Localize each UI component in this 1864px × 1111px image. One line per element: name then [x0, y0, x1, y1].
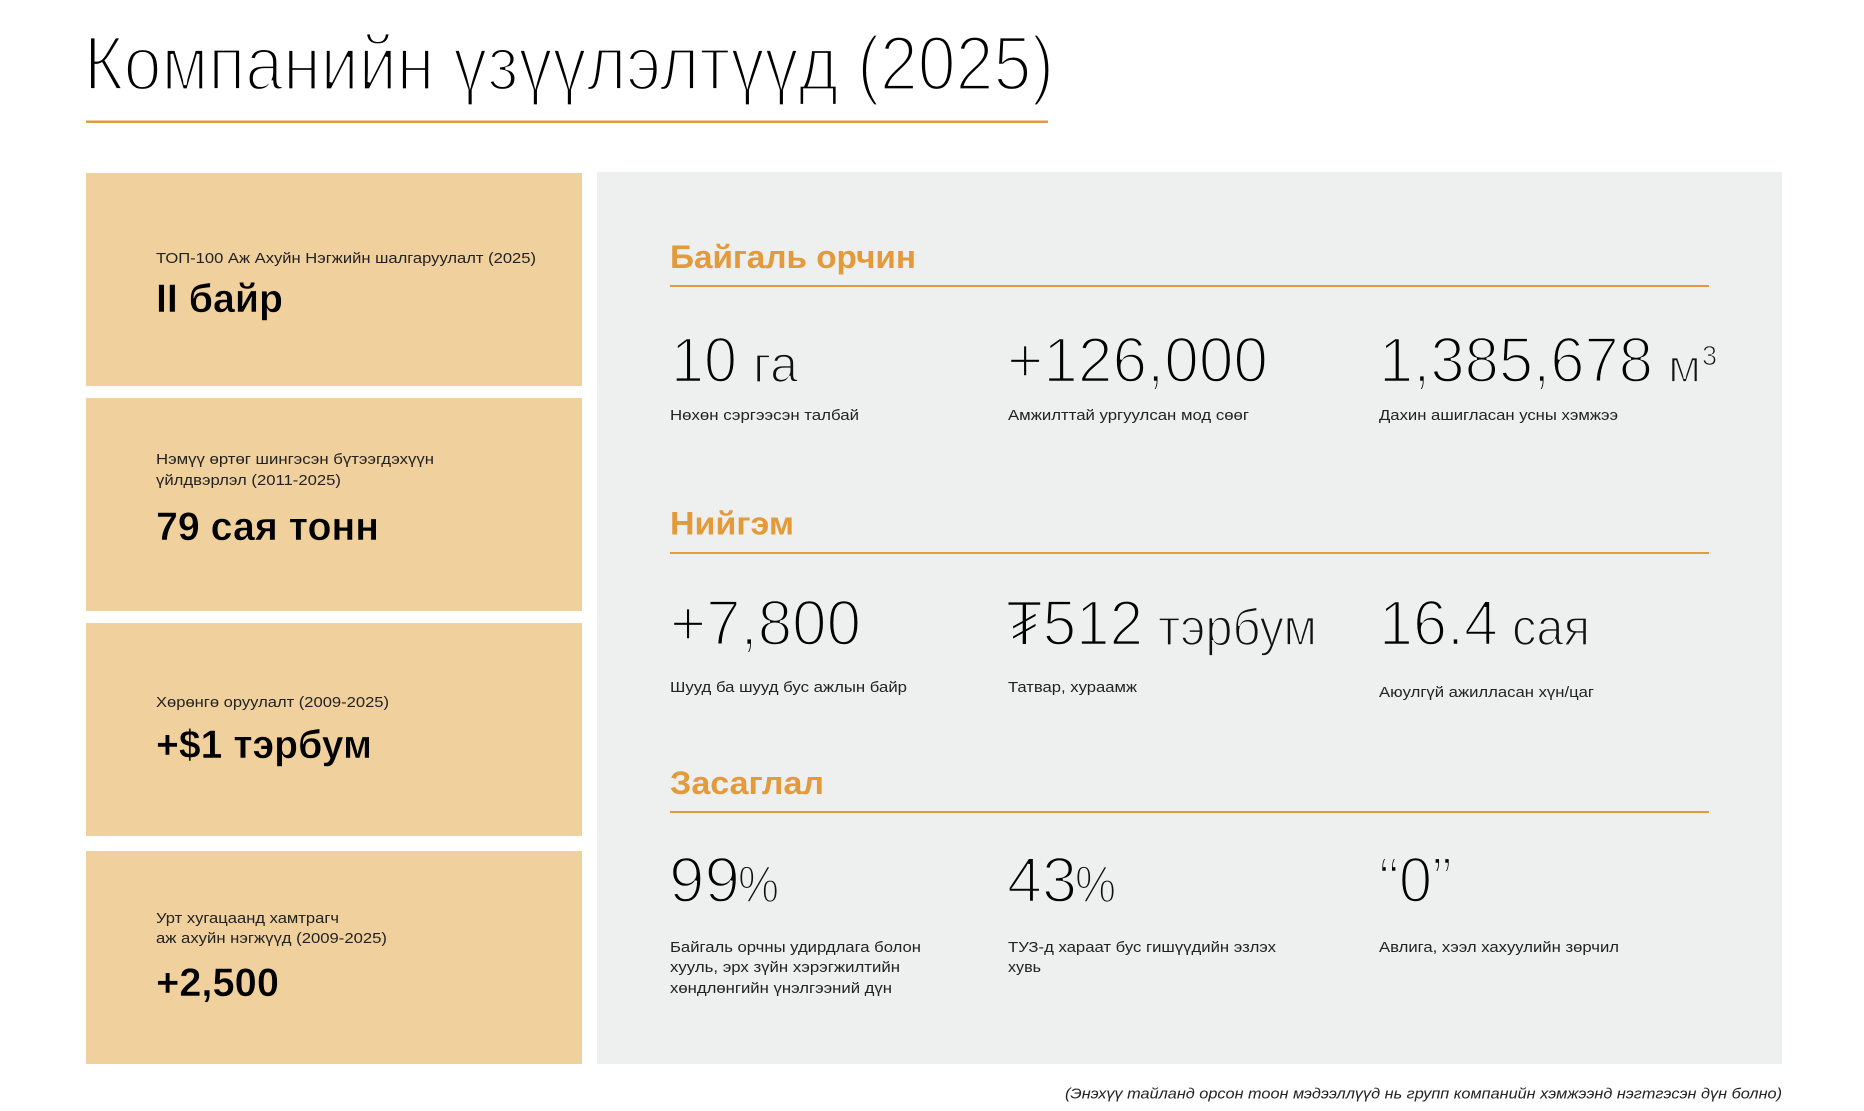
section: environment: Байгаль орчин [670, 239, 916, 275]
stat: audit score [669, 844, 921, 997]
stat: jobs: +7,800 [670, 587, 861, 659]
stat: independent directors: хувь [1008, 959, 1041, 976]
stat: restored area: 10 [671, 324, 737, 396]
stat: reused water [1379, 324, 1717, 424]
card: value-added production [86, 398, 582, 611]
card: value-added production: 79 сая тонн [156, 505, 379, 549]
stat: reused water: Дахин ашигласан усны хэмжээ [1379, 407, 1618, 424]
stat: audit score: % [738, 856, 779, 914]
stat: taxes [1006, 587, 1317, 696]
stat: taxes: Татвар, хураамж [1008, 679, 1137, 696]
title: Компанийн үзүүлэлтүүд (2025) [84, 21, 1054, 107]
stat: restored area [670, 324, 859, 424]
card: long-term partners: Урт хугацаанд хамтрагч [156, 910, 339, 927]
section: social: Нийгэм [670, 506, 794, 542]
stat: taxes: тэрбум [1158, 599, 1317, 657]
panel: key figure cards [86, 173, 582, 1064]
section: environment [670, 239, 1717, 424]
card: long-term partners: аж ахуйн нэгжүүд (2009-2025) [156, 930, 387, 947]
card: investment [86, 623, 582, 836]
stat: corruption violations [1379, 844, 1619, 956]
stat: reused water: 3 [1702, 340, 1717, 371]
stat: restored area: га [753, 336, 798, 394]
stat: safe hours: 16.4 [1379, 587, 1498, 659]
stat: reused water: м [1668, 340, 1701, 392]
stat: audit score: хууль, эрх зүйн хэрэгжилтийн [670, 959, 900, 976]
panel: ESG indicators [597, 172, 1782, 1064]
stat: independent directors: % [1075, 856, 1116, 914]
stat: reused water: 1,385,678 [1379, 324, 1653, 396]
stat: safe hours [1379, 587, 1595, 701]
stat: audit score: хөндлөнгийн үнэлгээний дүн [670, 980, 892, 997]
title underline [86, 120, 1048, 123]
stat: audit score: 99 [669, 844, 740, 916]
stat: independent directors [1007, 844, 1277, 976]
card: top 100 ranking: II байр [156, 277, 283, 321]
card: top 100 ranking [86, 173, 582, 386]
footnote: (Энэхүү тайланд орсон тоон мэдээллүүд нь групп компанийн хэмжээнд нэгтгэсэн дүн болно) [1065, 1086, 1782, 1102]
section: governance [669, 765, 1709, 997]
stat: jobs [670, 587, 907, 696]
stat: corruption violations: Авлига, хээл хахуулийн зөрчил [1379, 939, 1619, 956]
card: long-term partners: +2,500 [156, 961, 279, 1005]
card: value-added production: үйлдвэрлэл (2011-2025) [156, 472, 341, 489]
card: investment: +$1 тэрбум [156, 723, 372, 767]
card: long-term partners [86, 851, 582, 1064]
section: social [670, 506, 1709, 701]
card: investment: Хөрөнгө оруулалт (2009-2025) [156, 694, 389, 711]
section: governance: Засаглал [670, 765, 824, 801]
card: value-added production: Нэмүү өртөг шингэсэн бүтээгдэхүүн [156, 451, 434, 468]
stat: audit score: Байгаль орчны удирдлага болон [670, 939, 921, 956]
stat: safe hours: Аюулгүй ажилласан хүн/цаг [1379, 684, 1595, 701]
stat: safe hours: сая [1512, 599, 1590, 657]
stat: independent directors: 43 [1007, 844, 1077, 916]
stat: taxes: ₮512 [1006, 587, 1143, 659]
stat: seedlings: +126,000 [1007, 324, 1268, 396]
stat: corruption violations: “0” [1379, 844, 1452, 916]
stat: restored area: Нөхөн сэргээсэн талбай [670, 407, 859, 424]
stat: seedlings: Амжилттай ургуулсан мод сөөг [1008, 407, 1250, 424]
stat: jobs: Шууд ба шууд бус ажлын байр [670, 679, 907, 696]
card: top 100 ranking: ТОП-100 Аж Ахуйн Нэгжийн шалгаруулалт (2025) [156, 250, 536, 267]
stat: independent directors: ТУЗ-д хараат бус гишүүдийн эзлэх [1008, 939, 1277, 956]
